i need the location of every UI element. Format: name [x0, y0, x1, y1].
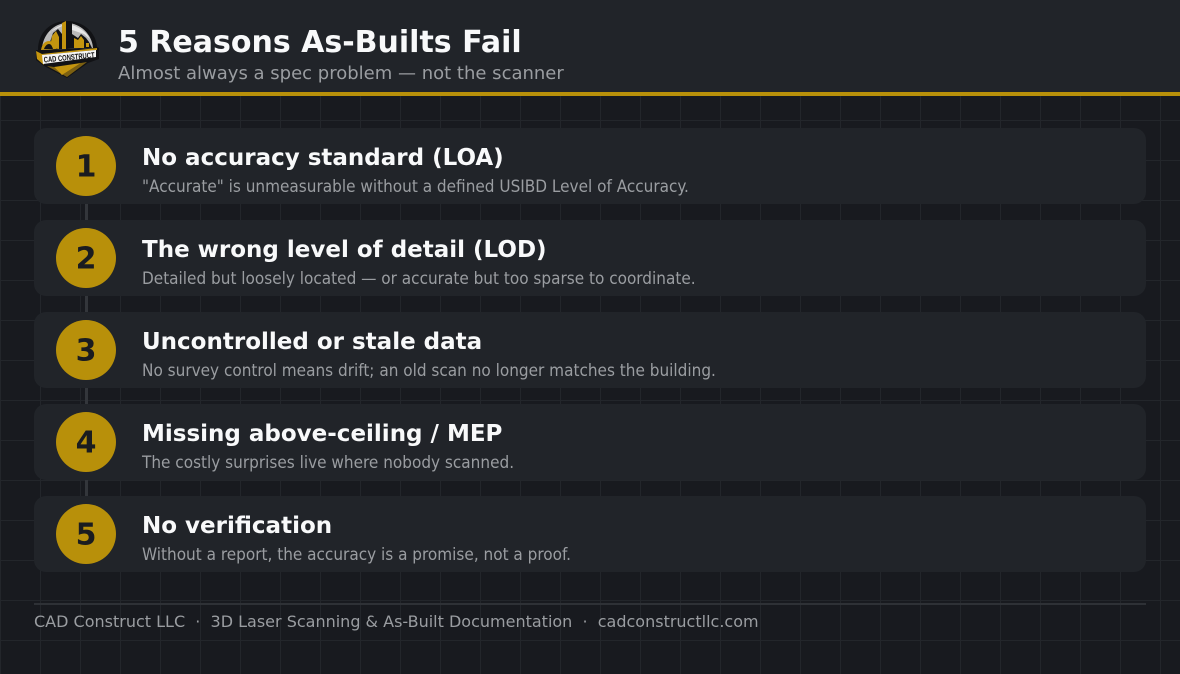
panel: reason 1: "Accurate" is unmeasurable without a defined USIBD Level of Accuracy. — [142, 177, 689, 197]
panel: reason 4: The costly surprises live where nobody scanned. — [141, 453, 514, 473]
panel: reason 3: Uncontrolled or stale data — [142, 329, 482, 355]
panel: reason 2 — [34, 220, 1146, 296]
subtitle: Almost always a spec problem — not the scanner — [118, 63, 564, 84]
icon: CAD Construct logo: CAD CONSTRUCT — [43, 51, 95, 64]
panel: reason 1: 1 — [76, 150, 96, 184]
footer divider — [34, 603, 1146, 605]
panel: reason 5: 5 — [76, 518, 96, 552]
panel: reason 3 — [34, 312, 1146, 388]
footer text: CAD Construct LLC · 3D Laser Scanning & As-Built Documentation · cadconstructllc.com — [34, 612, 759, 631]
panel: reason 4: 4 — [76, 426, 96, 460]
header band — [0, 0, 1180, 96]
panel: reason 5 — [34, 496, 1146, 572]
panel: reason 3: No survey control means drift; an old scan no longer matches the building. — [142, 361, 716, 381]
connector lines — [85, 204, 88, 496]
icon: CAD Construct logo — [36, 21, 99, 78]
panel: reason 5: Without a report, the accuracy is a promise, not a proof. — [142, 545, 571, 565]
panel: reason 2: 2 — [76, 242, 96, 276]
panel: reason 3: 3 — [76, 334, 96, 368]
title: 5 Reasons As-Builts Fail — [118, 25, 522, 60]
panel: reason 5: No verification — [142, 513, 332, 539]
panel: reason 1 — [34, 128, 1146, 204]
panel: reason 4 — [34, 404, 1146, 480]
panel: reason 2: The wrong level of detail (LOD) — [142, 237, 547, 263]
panel: reason 2: Detailed but loosely located — or accurate but too sparse to coordinate. — [142, 269, 696, 289]
panel: reason 1: No accuracy standard (LOA) — [142, 145, 504, 171]
panel: reason 4: Missing above-ceiling / MEP — [142, 421, 502, 447]
